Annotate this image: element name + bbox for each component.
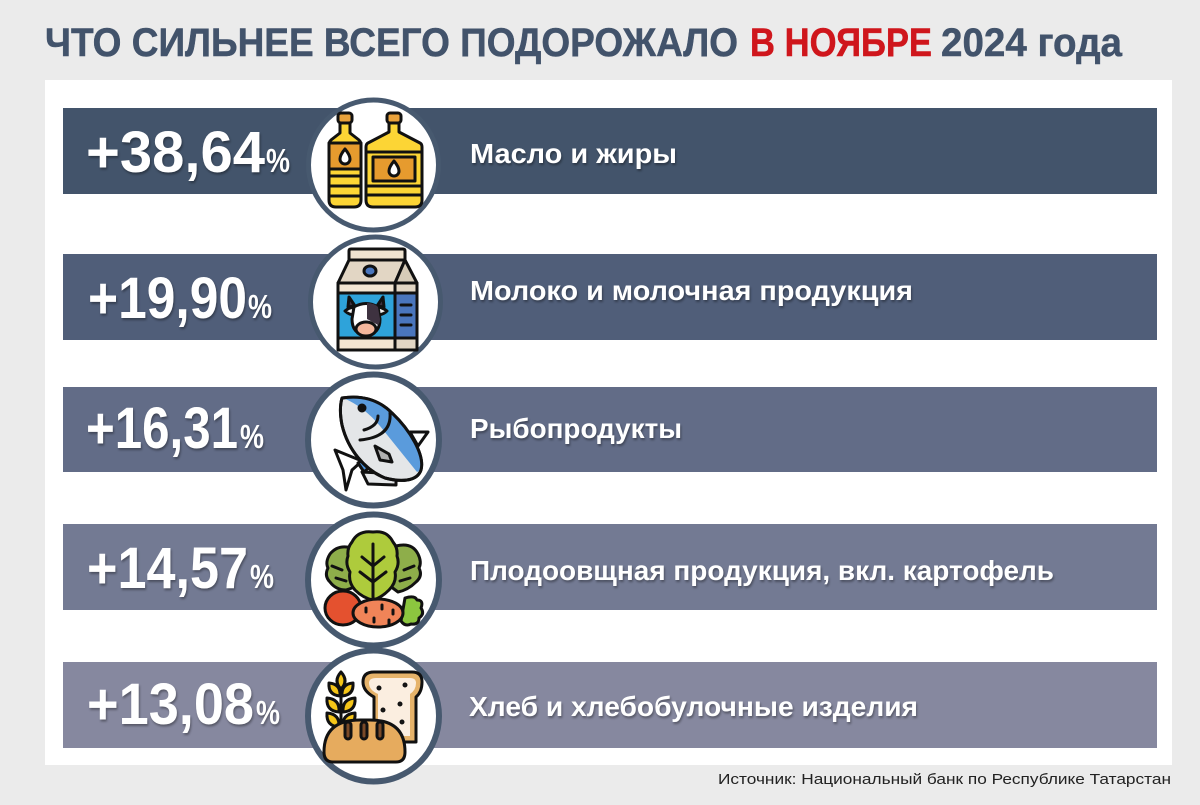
value 1: % [266, 142, 290, 179]
value 5: % [256, 694, 280, 731]
bar 3 [63, 387, 1157, 472]
icon: milk carton [310, 237, 440, 367]
value 5: +13,08 [87, 672, 254, 737]
row: vegetables [63, 524, 1157, 610]
label 5: Хлеб и хлебобулочные изделия [469, 691, 918, 722]
value 2: % [248, 288, 272, 325]
bar 4 [63, 524, 1157, 610]
label 1: Масло и жиры [470, 138, 677, 169]
label 3: Рыбопродукты [470, 413, 682, 444]
row: bread [63, 662, 1157, 748]
value 1: +38,64 [86, 120, 265, 185]
bar 2 [63, 254, 1157, 340]
title: ЧТО СИЛЬНЕЕ ВСЕГО ПОДОРОЖАЛО [45, 21, 738, 65]
bar 5 [63, 662, 1157, 748]
source note: Источник: Национальный банк по Республике Татарстан [718, 772, 1171, 788]
label 2: Молоко и молочная продукция [470, 275, 913, 306]
value 2: +19,90 [88, 266, 247, 331]
icon: fish [308, 374, 439, 506]
row: oils and fats [63, 108, 1157, 194]
bar 1 [63, 108, 1157, 194]
icon: oil bottles [308, 100, 438, 230]
value 3: % [240, 418, 264, 455]
title: В НОЯБРЕ [750, 21, 932, 65]
value 4: +14,57 [87, 536, 248, 601]
icon: bread and wheat [308, 650, 439, 782]
title [45, 21, 1123, 65]
row: fish [63, 387, 1157, 472]
value 4: % [250, 558, 274, 595]
title: 2024 года [941, 21, 1123, 65]
value 3: +16,31 [86, 396, 238, 461]
white panel [45, 80, 1172, 765]
icon: vegetables [308, 514, 439, 646]
label 4: Плодоовщная продукция, вкл. картофель [470, 555, 1054, 586]
row: milk [63, 254, 1157, 340]
